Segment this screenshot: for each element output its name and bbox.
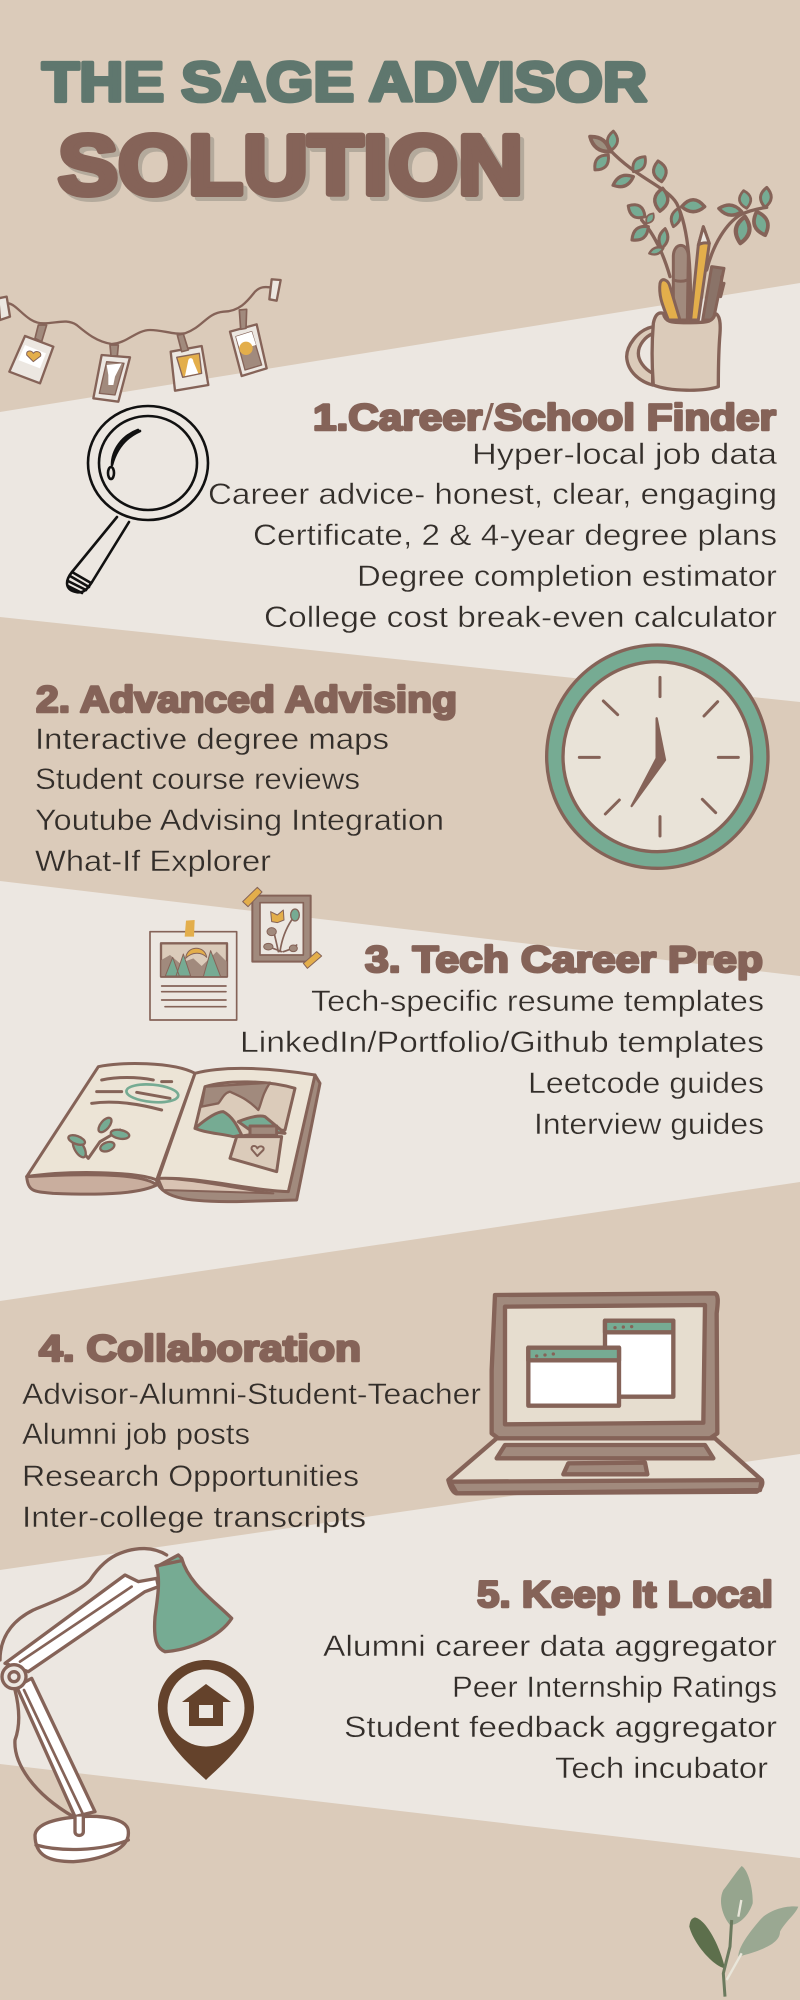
- photo 4: [230, 309, 267, 376]
- text: section 4 list: Research Opportunities: [22, 1460, 359, 1493]
- back window: [605, 1321, 673, 1397]
- icon: desk lamp: [0, 1549, 232, 1862]
- text: section 1 list: Hyper-local job data: [472, 438, 777, 471]
- heading: career school finder: 1.Career /School Finder: [313, 397, 776, 438]
- text: section 2 list: What-If Explorer: [35, 845, 271, 878]
- photo 2: [93, 345, 130, 402]
- heading: keep it local: 5. Keep It Local: [477, 1574, 773, 1615]
- text: section 5 list: Peer Internship Ratings: [452, 1671, 777, 1704]
- heading: tech career prep: 3. Tech Career Prep: [365, 939, 763, 980]
- text: section 5 list: Tech incubator: [555, 1752, 768, 1785]
- heading: collaboration: 4. Collaboration: [39, 1328, 361, 1369]
- text: section 2 list: Youtube Advising Integration: [35, 804, 444, 837]
- pens: [660, 227, 724, 320]
- photo 3: [171, 334, 208, 391]
- text: section 4 list: Inter-college transcripts: [22, 1501, 366, 1534]
- text: section 2 list: Interactive degree maps: [35, 723, 389, 756]
- text: section 3 list: [240, 985, 764, 1141]
- photo 1: [9, 325, 53, 383]
- text: section 3 list: LinkedIn/Portfolio/Github templates: [240, 1026, 764, 1059]
- text: section 3 list: Tech-specific resume templates: [311, 985, 764, 1018]
- mug: [627, 327, 653, 385]
- text: section 1 list: [208, 438, 777, 634]
- icon: watercolor plant: [689, 1866, 798, 1997]
- title: solution: SOLUTION: [58, 118, 523, 212]
- icon: location pin with house: [158, 1660, 254, 1780]
- text: section 5 list: Alumni career data aggregator: [323, 1630, 777, 1663]
- icon: garland of photos: [0, 279, 281, 402]
- icon: open book: [27, 1063, 320, 1202]
- text: section 4 list: [22, 1378, 481, 1534]
- icon: laptop: [448, 1293, 762, 1493]
- front window: [528, 1348, 619, 1406]
- text: section 5 list: [323, 1630, 777, 1785]
- heading: advanced advising: 2. Advanced Advising: [36, 679, 457, 720]
- icon: plant and pens in mug: [587, 131, 772, 390]
- text: section 1 list: Career advice- honest, clear, engaging: [208, 478, 777, 511]
- icon: photo note: [150, 920, 237, 1020]
- text: section 3 list: Leetcode guides: [528, 1067, 764, 1100]
- text: section 1 list: Degree completion estimator: [357, 560, 777, 593]
- text: section 2 list: Student course reviews: [35, 763, 360, 796]
- icon: wall clock: [547, 645, 768, 868]
- icon: framed flower: [243, 887, 322, 968]
- title: the sage advisor: THE SAGE ADVISOR: [42, 50, 647, 113]
- leaves: [587, 131, 772, 257]
- text: section 1 list: College cost break-even calculator: [264, 601, 777, 634]
- text: section 1 list: Certificate, 2 & 4-year degree plans: [253, 519, 777, 552]
- text: section 2 list: [35, 723, 444, 878]
- text: section 3 list: Interview guides: [534, 1108, 764, 1141]
- text: section 4 list: Alumni job posts: [22, 1418, 250, 1451]
- title: solution: SOLUTION: [62, 122, 527, 216]
- text: section 5 list: Student feedback aggregator: [344, 1711, 777, 1744]
- text: section 4 list: Advisor-Alumni-Student-Teacher: [22, 1378, 481, 1411]
- icon: magnifying glass: [67, 406, 208, 593]
